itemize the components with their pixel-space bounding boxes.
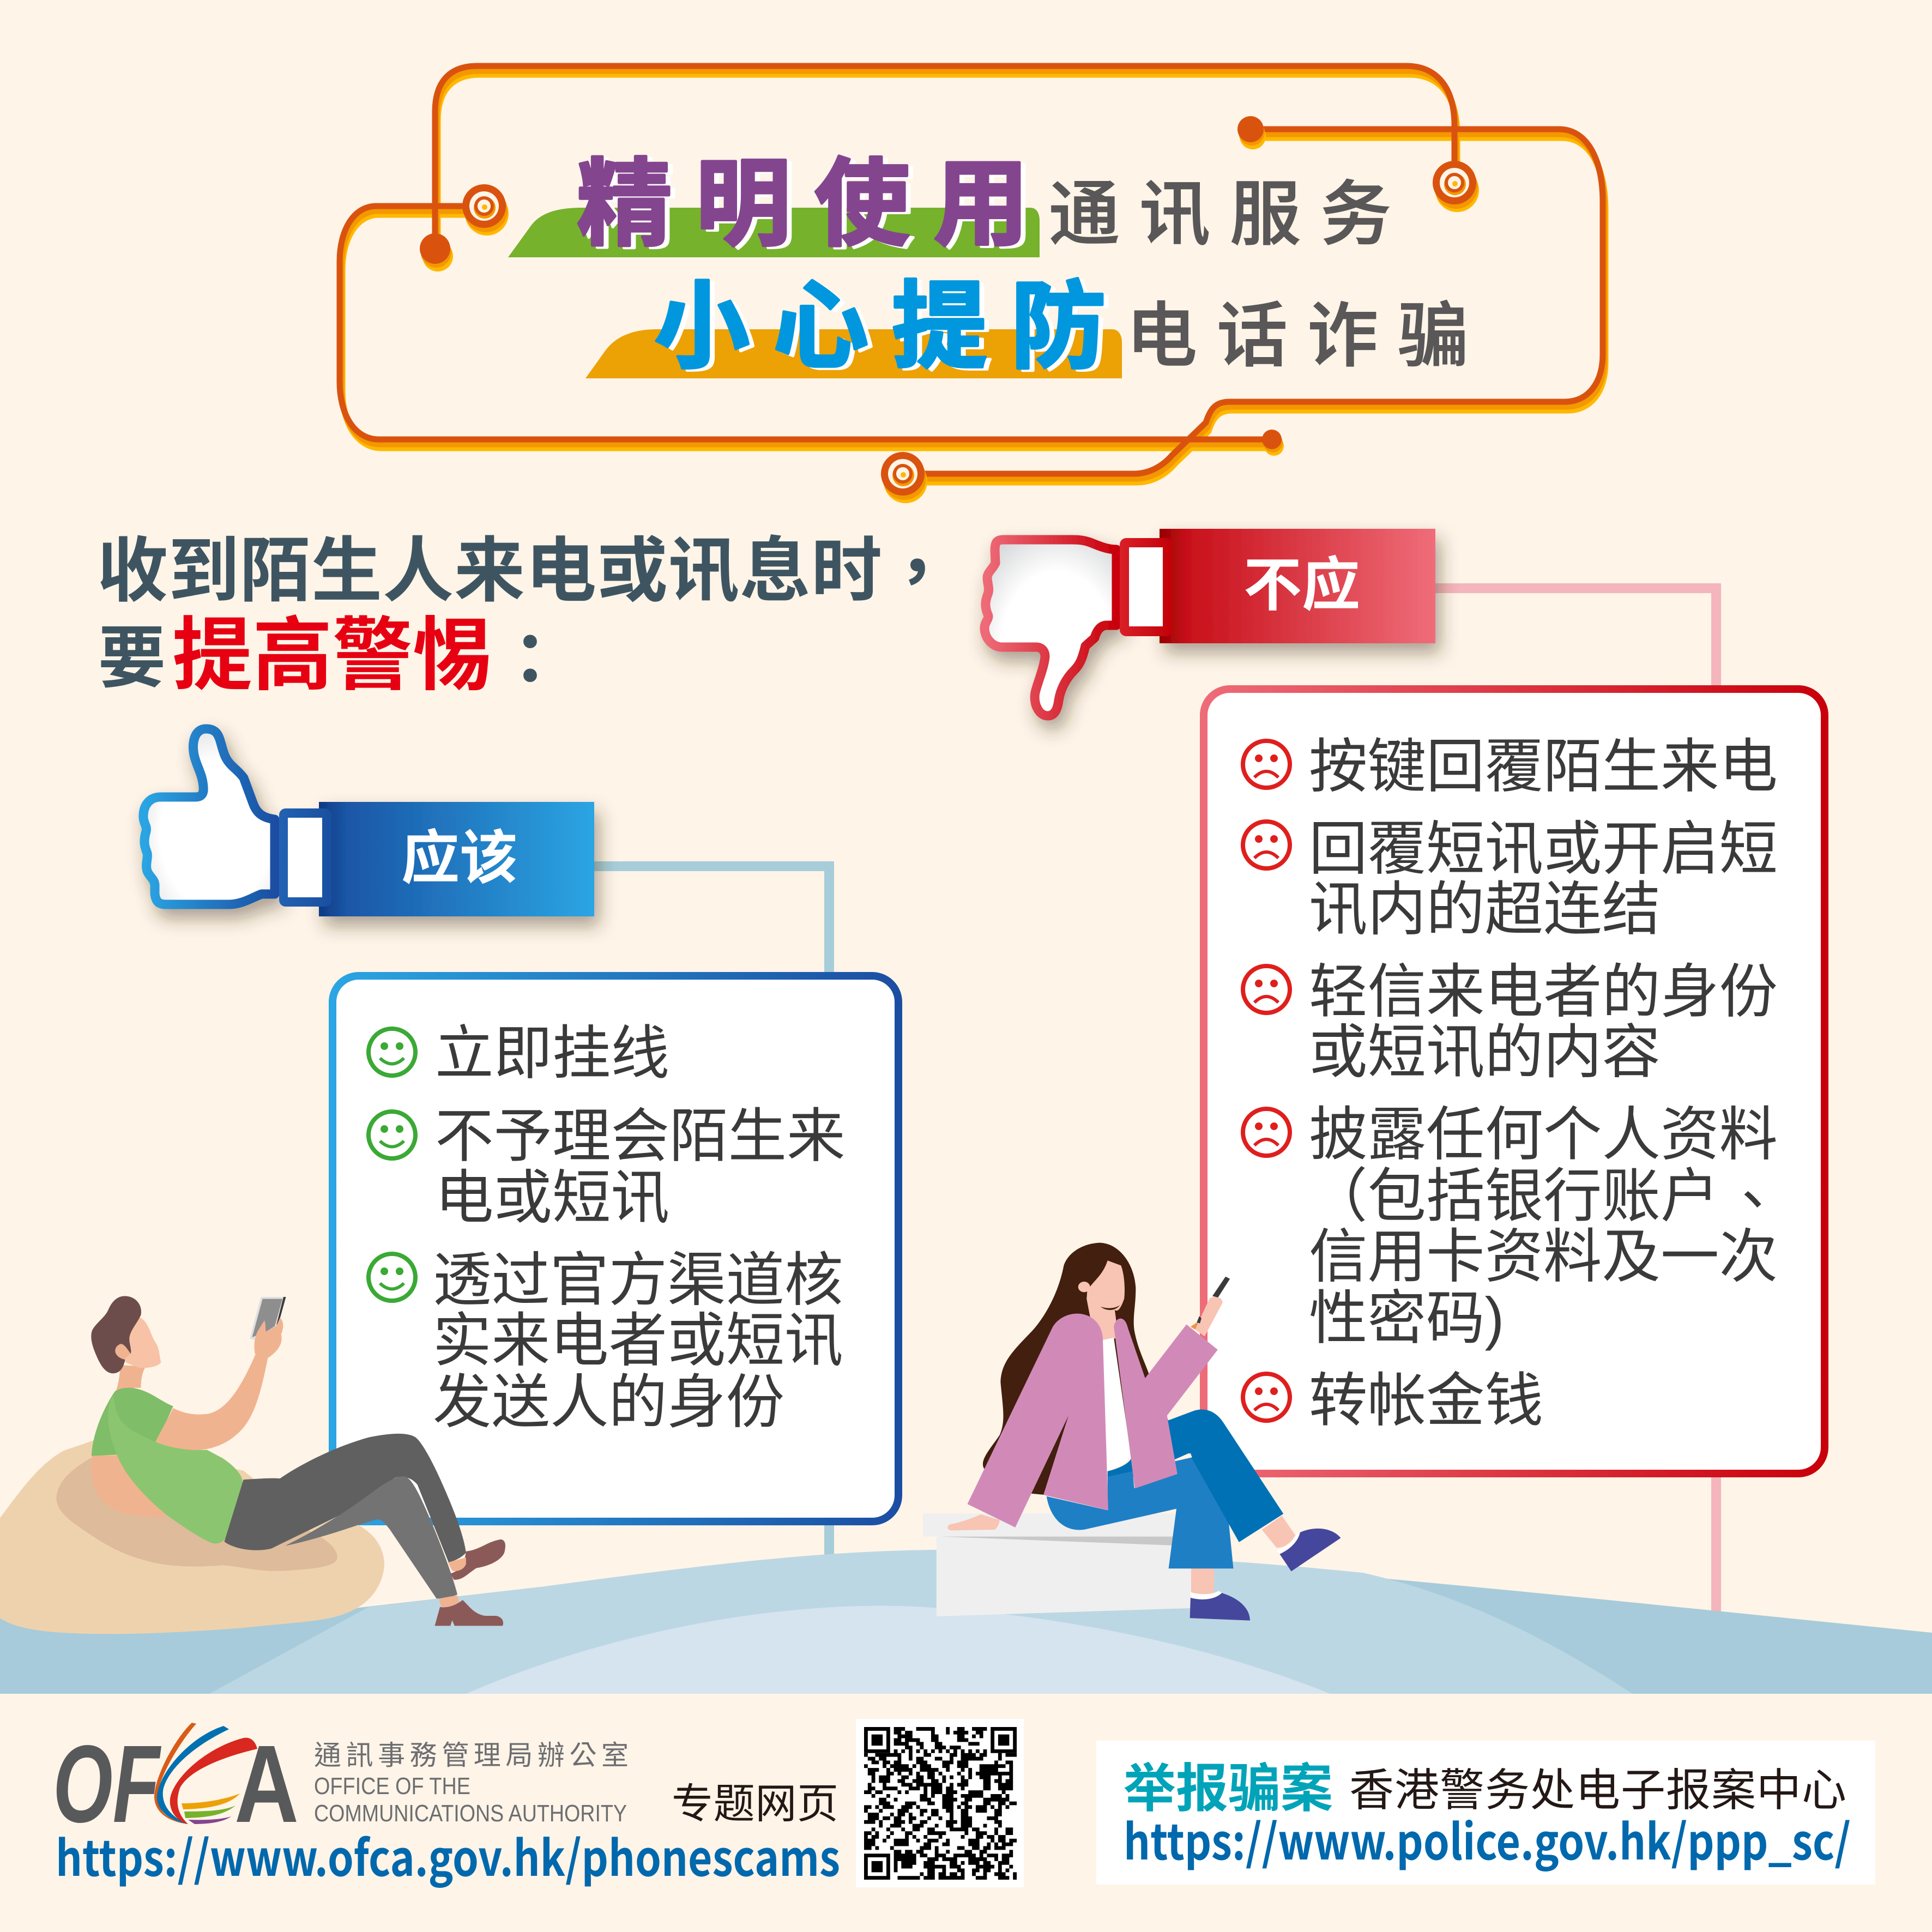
item: disclose xyxy=(1309,1102,1800,1351)
heading: ： xyxy=(512,617,583,697)
item: verify: 发送人的身份 xyxy=(433,1369,784,1435)
title line 1 xyxy=(577,152,1391,260)
icon: thumbs up xyxy=(143,729,275,904)
title line 2: 小心提防 xyxy=(654,274,1106,381)
banner: should not: 不应 xyxy=(1243,552,1360,618)
footer: OFCA logo xyxy=(53,1722,629,1845)
item: trust: 或短讯的内容 xyxy=(1309,1019,1661,1085)
panel: report scam xyxy=(1096,1741,1875,1885)
ground xyxy=(0,1550,1932,1694)
item: ignore: 电或短讯 xyxy=(435,1165,669,1230)
footer: OFCA logo: OFFICE OF THE xyxy=(314,1773,470,1800)
banner: should xyxy=(279,802,594,916)
item: hang up: 立即挂线 xyxy=(435,1021,669,1086)
item: ignore: 不予理会陌生来 xyxy=(435,1103,846,1169)
title line 2: 小心提防 xyxy=(659,276,1111,383)
item: ignore xyxy=(435,1103,846,1230)
item: press key: 按键回覆陌生来电 xyxy=(1309,734,1778,799)
connector: should xyxy=(594,866,829,1608)
title line 1: 通讯服务 xyxy=(1049,174,1391,254)
banner: should not xyxy=(1120,529,1435,643)
item: transfer: 转帐金钱 xyxy=(1309,1368,1543,1433)
footer: OFCA logo: COMMUNICATIONS AUTHORITY xyxy=(314,1800,627,1827)
heading xyxy=(97,511,968,701)
panel: should xyxy=(333,976,898,1522)
item: verify xyxy=(433,1247,843,1435)
QR code xyxy=(856,1719,1024,1887)
icon: smile xyxy=(369,1254,415,1301)
item: verify: 透过官方渠道核 xyxy=(433,1247,843,1313)
title highlight: amber xyxy=(585,329,1122,378)
title line 2: 电话诈骗 xyxy=(1126,296,1469,376)
icon: sad xyxy=(1243,741,1290,788)
item: disclose: 性密码) xyxy=(1309,1285,1504,1351)
connector: should not xyxy=(1435,588,1716,1635)
heading: 要 xyxy=(98,621,166,696)
panel: report scam: 香港警务处电子报案中心 xyxy=(1349,1766,1846,1815)
item: disclose: （包括银行账户 xyxy=(1309,1163,1719,1229)
title line 1: 精明使用 xyxy=(577,152,1029,258)
item: disclose: 信用卡资料及一次 xyxy=(1309,1224,1778,1289)
panel: should not xyxy=(1204,689,1825,1474)
item: trust xyxy=(1309,959,1778,1085)
item: reply sms xyxy=(1309,816,1778,942)
item: reply sms: 回覆短讯或开启短 xyxy=(1309,816,1778,882)
title highlight: green xyxy=(508,208,1040,257)
item: disclose: 披露任何个人资料 xyxy=(1309,1102,1778,1167)
heading: 收到陌生人来电或讯息时 xyxy=(97,531,882,611)
title line 2 xyxy=(654,274,1469,383)
footer: OFCA logo: A xyxy=(234,1722,299,1845)
label: topic webpage: 专题网页 xyxy=(672,1781,838,1827)
heading: 提高警惕 xyxy=(172,611,493,701)
panel: report scam: 举报骗案 xyxy=(1124,1760,1333,1818)
item: disclose: 、 xyxy=(1741,1151,1800,1217)
item: verify: 实来电者或短讯 xyxy=(433,1308,843,1373)
illustration: man on beanbag with phone xyxy=(0,1296,505,1634)
circuit end dots xyxy=(420,116,1284,456)
footer: OFCA logo: OF xyxy=(53,1722,161,1845)
title line 1: 精明使用 xyxy=(582,154,1034,260)
icon: sad xyxy=(1243,822,1290,868)
icon: sad xyxy=(1243,1109,1290,1156)
icon: sad xyxy=(1243,1374,1290,1421)
title circuit frame xyxy=(340,66,1605,482)
heading: ， xyxy=(897,511,968,591)
circuit rings xyxy=(462,161,1479,503)
banner: should: 应该 xyxy=(401,825,518,891)
icon: thumbs down xyxy=(985,540,1116,716)
item: reply sms: 讯内的超连结 xyxy=(1309,877,1661,942)
icon: sad xyxy=(1243,966,1290,1013)
icon: smile xyxy=(369,1029,415,1076)
icon: smile xyxy=(369,1112,415,1158)
item: trust: 轻信来电者的身份 xyxy=(1309,959,1778,1024)
illustration: woman sitting on box with phone xyxy=(923,1243,1341,1621)
footer: OFCA logo: 通訊事務管理局辦公室 xyxy=(314,1740,629,1771)
link: OFCA url: https://www.ofca.gov.hk/phonescams xyxy=(56,1819,840,1890)
